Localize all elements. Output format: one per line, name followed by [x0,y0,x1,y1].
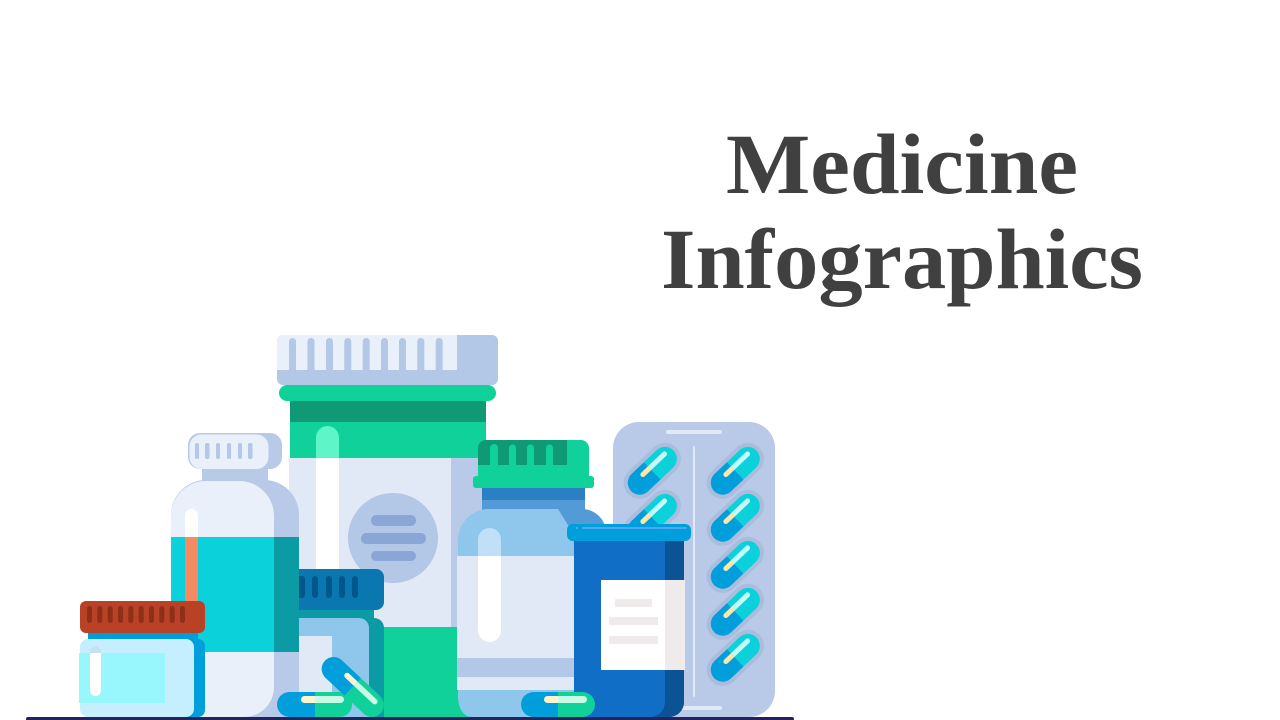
capsule: horizontal right [521,692,595,717]
ground line [26,717,794,720]
blister pill [700,530,771,599]
small red-lid jar [79,601,205,717]
big jar [277,335,498,717]
blister pack [613,422,775,717]
title: Infographics [661,211,1143,307]
light blue jar with green cap [457,440,606,717]
blister pill [700,436,771,505]
dark blue bottle [567,524,691,717]
left tall bottle [171,433,299,717]
blister pill [700,623,771,692]
illustration: medicine bottles [79,335,775,720]
title [661,116,1143,307]
blister pill [700,577,771,646]
title: Medicine [726,116,1078,212]
capsule: horizontal left [277,692,352,717]
bottle label [601,580,685,670]
capsule: diagonal [317,652,389,720]
small teal bottle [299,569,384,717]
blister pill [617,436,688,505]
blister pill [617,483,688,552]
blister pill [700,483,771,552]
